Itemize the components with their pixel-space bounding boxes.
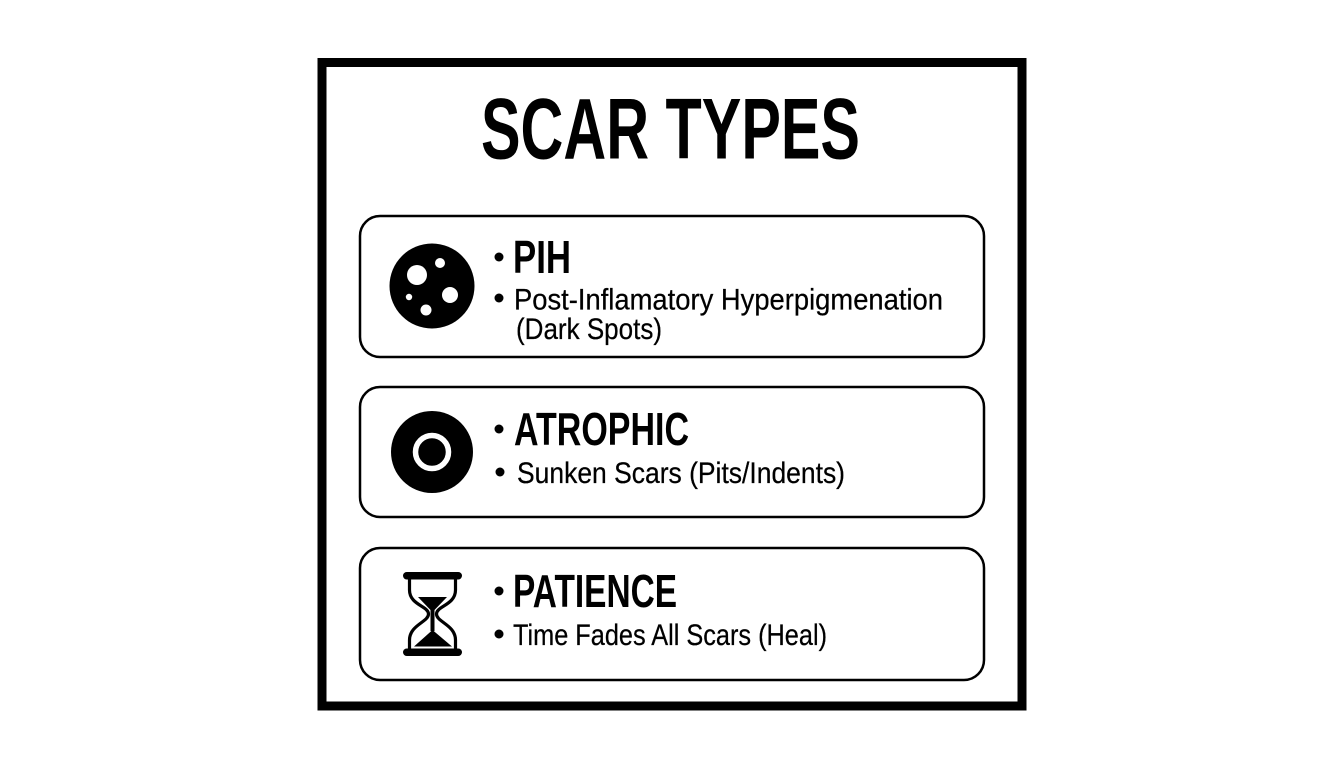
panel: Atrophic	[360, 387, 984, 517]
text: Atrophic description: Sunken Scars (Pits/Indents)	[517, 457, 845, 490]
text bullet: Atrophic description	[496, 468, 504, 476]
icon: sunken scar ring	[391, 411, 473, 493]
heading bullet: Atrophic	[494, 424, 504, 434]
text bullet: PIH description	[494, 294, 504, 302]
title: SCAR TYPES	[481, 82, 860, 178]
heading: PIH: PIH	[513, 231, 571, 283]
text: Patience description: Time Fades All Scars (Heal)	[513, 619, 827, 652]
panel: scar types frame	[322, 62, 1022, 706]
heading: Atrophic: ATROPHIC	[514, 403, 689, 455]
text: PIH description line 1: Post-Inflamatory Hyperpigmenation	[514, 284, 943, 316]
panel: Patience	[360, 548, 984, 680]
icon: dark spots circle	[390, 244, 474, 328]
heading bullet: PIH	[494, 252, 504, 262]
panel: PIH	[360, 216, 984, 357]
heading: Patience: PATIENCE	[513, 565, 677, 617]
heading bullet: Patience	[494, 586, 504, 596]
text bullet: Patience description	[494, 630, 504, 638]
text: PIH description line 2: (Dark Spots)	[516, 313, 662, 346]
icon: hourglass	[403, 572, 462, 656]
